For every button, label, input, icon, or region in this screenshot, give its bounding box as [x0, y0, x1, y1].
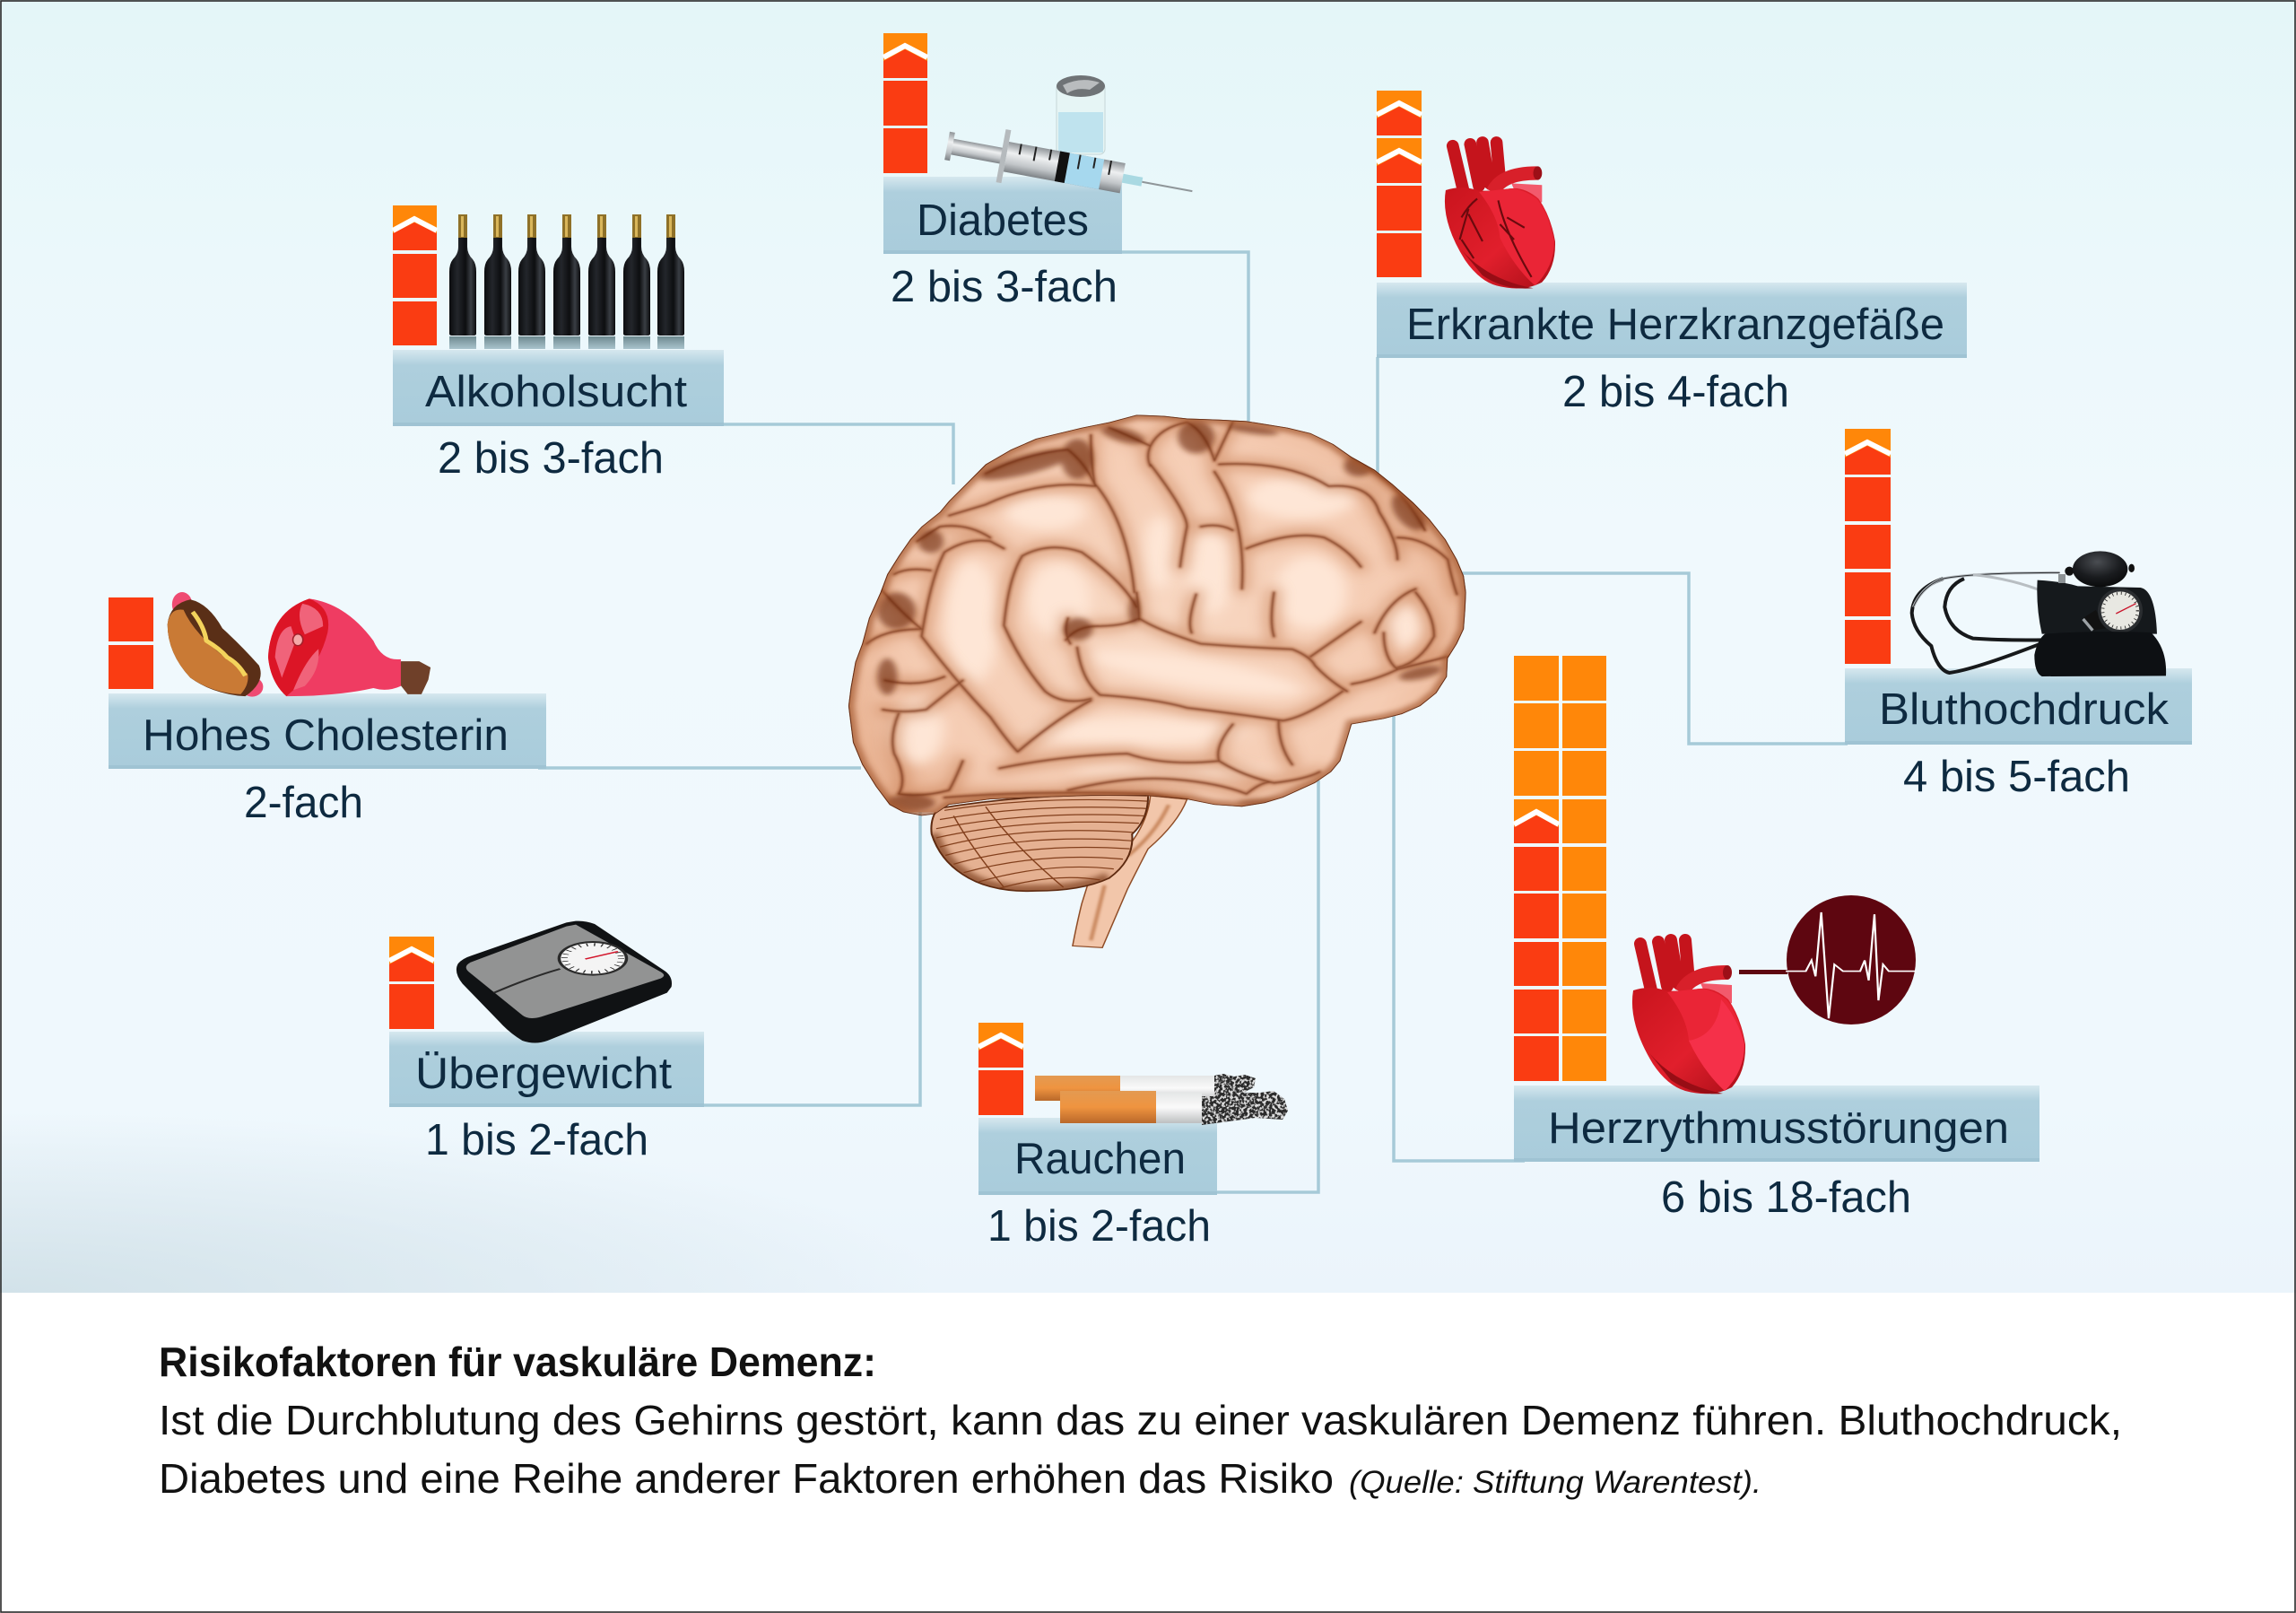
value: 4 bis 5-fach: [1903, 753, 2130, 801]
panel: Übergewicht: [389, 812, 920, 1164]
panel: Erkrankte Herzkranzgefäße: [1377, 91, 1967, 475]
source note: (Quelle: Stiftung Warentest).: [1349, 1465, 1761, 1500]
icon: heart: [1632, 940, 1745, 1094]
label bar: [109, 693, 546, 769]
icon: ham: [268, 598, 430, 696]
risk bar: [109, 597, 153, 689]
risk bar: [883, 33, 927, 173]
label bar: [1514, 1086, 2039, 1162]
caption text block: [159, 1338, 2122, 1502]
panel: Hohes Cholesterin: [109, 592, 861, 827]
icon: cigarettes: [1035, 1074, 1288, 1125]
label text: Herzrythmusstörungen: [1548, 1104, 2009, 1153]
value: 1 bis 2-fach: [987, 1202, 1211, 1251]
panel: Rauchen: [978, 780, 1318, 1251]
risk bar: [389, 937, 434, 1029]
icon: ECG circle: [1739, 895, 1917, 1024]
connector line: [1202, 780, 1318, 1192]
connector line: [1462, 573, 1848, 744]
panel: Herzrythmusstörungen: [1394, 656, 2039, 1222]
label bar: [883, 177, 1122, 254]
icon: wine bottles: [449, 214, 684, 349]
value: 1 bis 2-fach: [425, 1116, 648, 1164]
caption line 2: Diabetes und eine Reihe anderer Faktoren erhöhen das Risiko: [159, 1455, 1334, 1502]
icon: vial and syringe: [943, 75, 1197, 218]
label bar: [978, 1118, 1217, 1195]
value: 2 bis 3-fach: [438, 434, 664, 483]
caption heading: Risikofaktoren für vaskuläre Demenz:: [159, 1338, 876, 1385]
label text: Erkrankte Herzkranzgefäße: [1406, 301, 1944, 349]
label bar: [389, 1032, 704, 1107]
risk bar: [393, 205, 437, 345]
connector line: [695, 812, 920, 1105]
connector line: [718, 424, 953, 484]
panel: Bluthochdruck: [1462, 429, 2192, 801]
panel: Alkoholsucht: [393, 205, 953, 484]
risk bar: [978, 1023, 1023, 1115]
icon: heart with coronary vessels: [1445, 143, 1555, 289]
value: 6 bis 18-fach: [1661, 1173, 1911, 1222]
label text: Übergewicht: [415, 1050, 672, 1098]
risk bar: [1845, 429, 1891, 664]
label bar: [1845, 668, 2192, 745]
cerebrum: [844, 409, 1475, 815]
icon: hot dog: [168, 592, 263, 697]
label bar: [1377, 283, 1967, 358]
label text: Hohes Cholesterin: [143, 711, 509, 760]
label bar: [393, 350, 724, 426]
value: 2 bis 4-fach: [1562, 368, 1789, 416]
risk bar: [1377, 91, 1422, 277]
label text: Rauchen: [1014, 1135, 1186, 1183]
icon: blood pressure monitor: [1912, 551, 2166, 676]
icon: bathroom scale: [457, 921, 672, 1042]
caption line 1: Ist die Durchblutung des Gehirns gestört, kann das zu einer vaskulären Demenz führen. Bluthochdruck,: [159, 1397, 2122, 1443]
connector line: [1112, 252, 1248, 431]
brain stem: [1073, 796, 1187, 947]
risk bar: two columns: [1514, 656, 1606, 1081]
label text: Bluthochdruck: [1879, 685, 2170, 734]
panel: Diabetes: [883, 33, 1248, 431]
cerebellum: [931, 795, 1148, 891]
brain illustration: [844, 409, 1475, 947]
value: 2-fach: [244, 779, 363, 827]
connector line: [1376, 357, 1379, 475]
connector line: [1394, 709, 1525, 1161]
label text: Diabetes: [917, 196, 1089, 245]
label text: Alkoholsucht: [425, 368, 687, 416]
value: 2 bis 3-fach: [891, 263, 1118, 311]
connector line: [538, 766, 861, 770]
